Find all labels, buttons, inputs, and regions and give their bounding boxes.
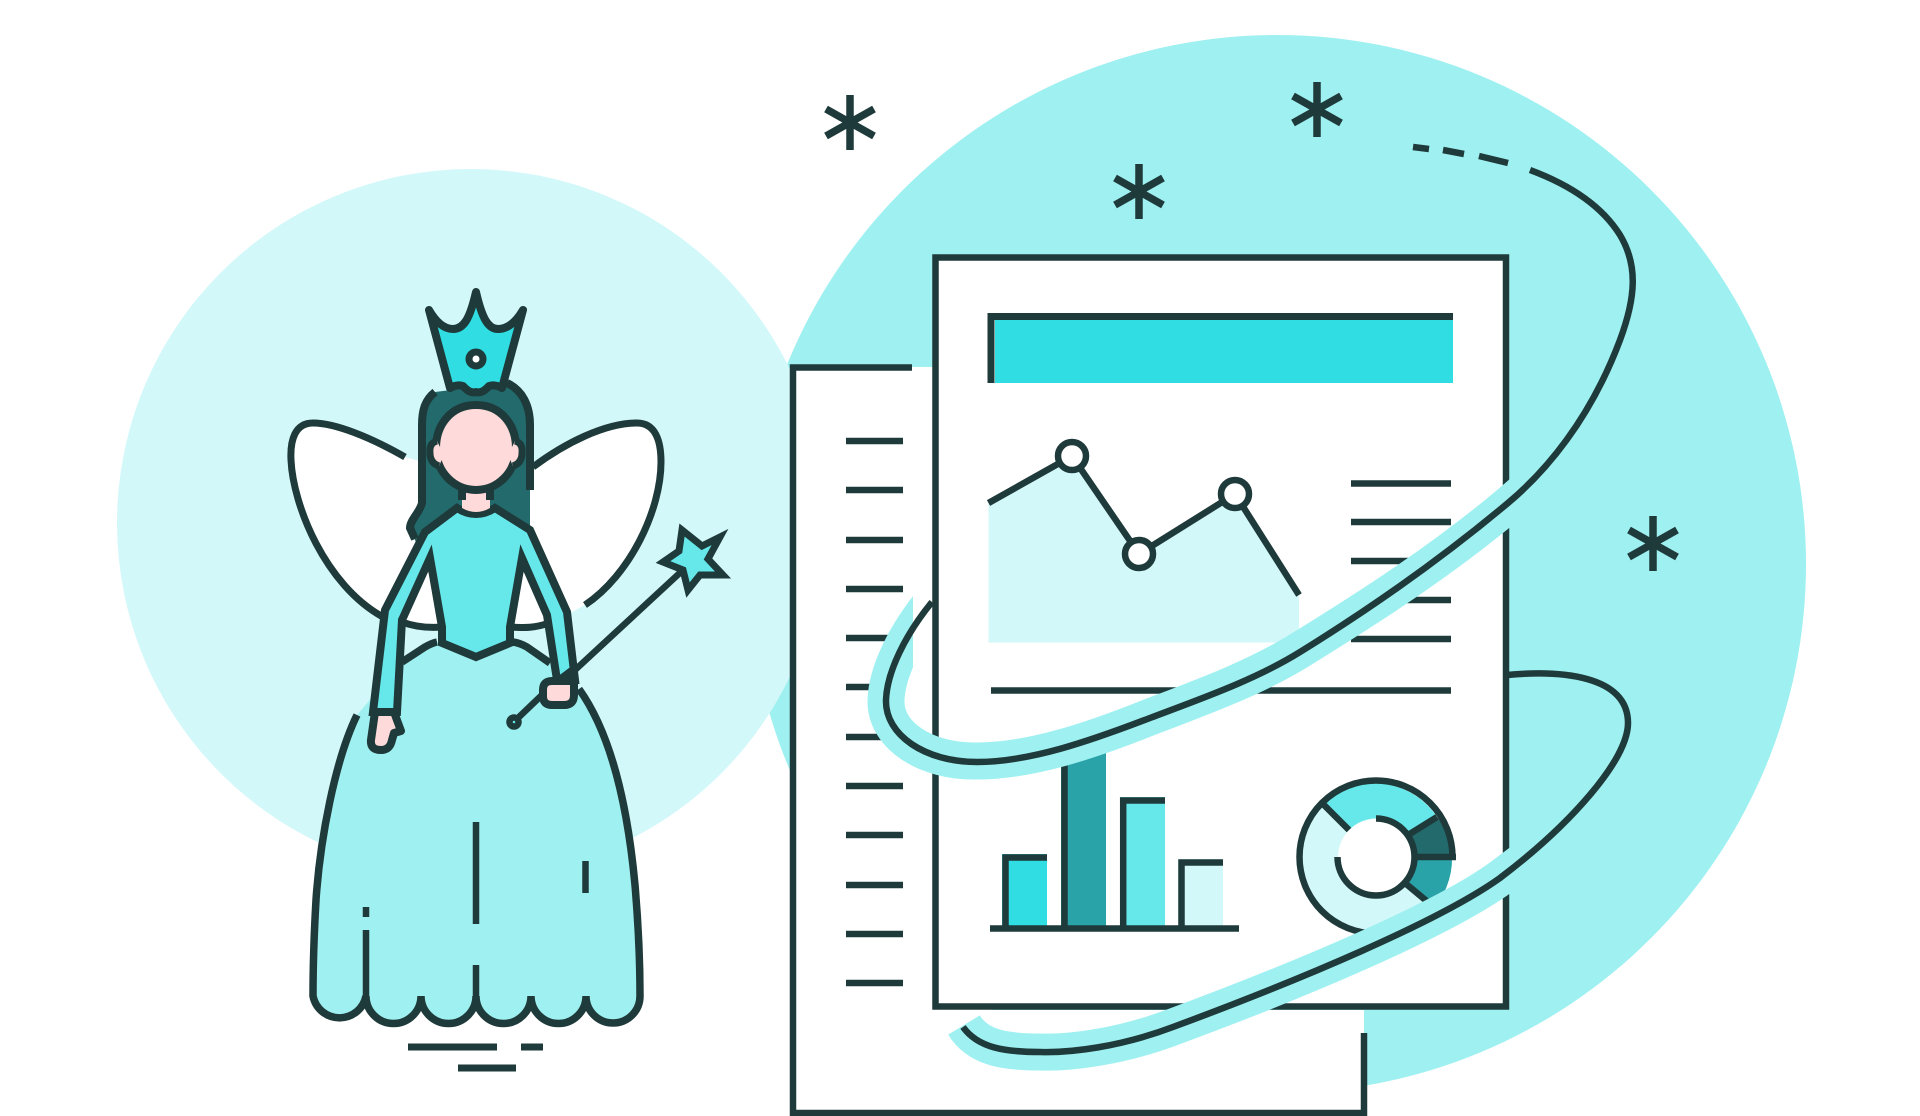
- wrist wedge: [557, 662, 577, 684]
- left hand: [371, 712, 401, 750]
- face: [436, 405, 516, 490]
- big background circle: [748, 35, 1806, 1093]
- right hand: [543, 681, 574, 705]
- donut chart: [1300, 780, 1456, 934]
- wand: [510, 530, 723, 726]
- left ear: [430, 441, 444, 466]
- line chart: [988, 442, 1299, 642]
- dress bodice and sleeves: [373, 508, 575, 712]
- lower orbit: [963, 673, 1628, 1052]
- skirt folds: [366, 822, 586, 1000]
- neck: [462, 488, 490, 512]
- skirt outline: [313, 642, 640, 1024]
- hair: [410, 383, 530, 600]
- asterisks: [826, 82, 1677, 571]
- front document: [936, 258, 1506, 1006]
- upper orbit: [886, 147, 1633, 762]
- neck outline: [462, 488, 490, 500]
- left wing: [291, 423, 450, 627]
- skirt: [313, 642, 640, 1024]
- back document: [793, 367, 1364, 1116]
- right wing: [500, 423, 661, 628]
- header bar: [991, 316, 1453, 383]
- crown: [429, 292, 523, 392]
- small background circle: [117, 169, 825, 877]
- dashed orbit tail: [1413, 147, 1508, 163]
- back document text lines: [846, 441, 903, 983]
- right ear: [508, 441, 522, 466]
- ground lines: [408, 1047, 543, 1068]
- chart legend lines: [991, 484, 1451, 690]
- bar chart: [990, 750, 1239, 929]
- fairy: [291, 292, 723, 1068]
